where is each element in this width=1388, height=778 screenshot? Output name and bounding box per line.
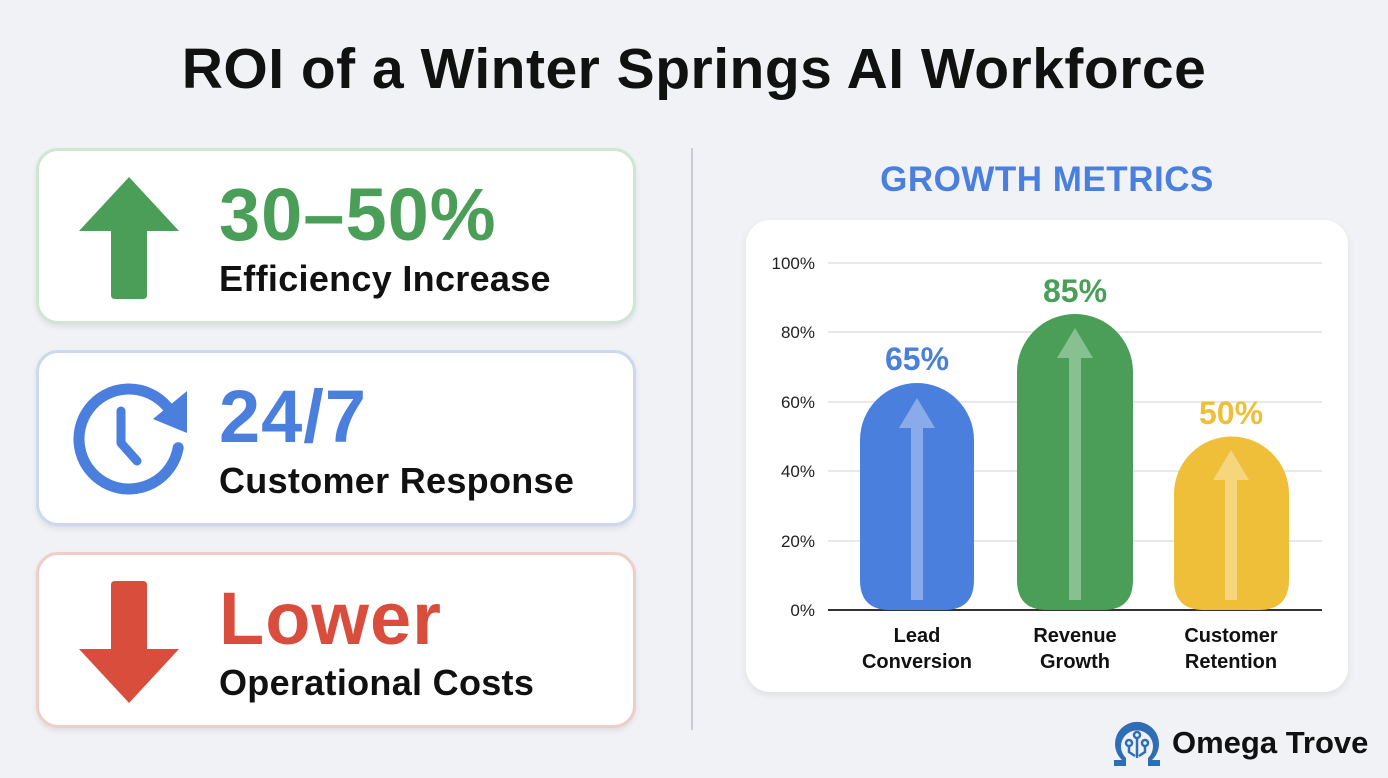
bar chart: 40% [781, 462, 815, 481]
label: efficiency increase: Efficiency Increase [219, 258, 551, 299]
x-axis labels: Revenue [1033, 625, 1117, 647]
bar: revenue growth [1017, 273, 1133, 610]
bar chart [772, 254, 1322, 673]
icon: clock [73, 384, 187, 494]
bar: revenue growth: 85% [1043, 273, 1107, 309]
bar chart: 0% [790, 601, 815, 620]
stat: lower: Lower [219, 577, 442, 660]
logo text: Omega Trove [1172, 725, 1368, 760]
title: ROI of a Winter Springs AI Workforce [182, 37, 1206, 101]
stat: 30-50%: 30–50% [219, 173, 497, 256]
x-axis labels: Growth [1040, 651, 1110, 673]
heading: growth metrics: GROWTH METRICS [880, 160, 1214, 199]
panel: costs [36, 552, 636, 728]
bar: lead conversion [860, 341, 974, 610]
bar chart: 20% [781, 532, 815, 551]
bar chart: 80% [781, 323, 815, 342]
bar: customer retention: 50% [1199, 395, 1263, 431]
bar: customer retention [1174, 395, 1289, 610]
label: customer response: Customer Response [219, 460, 574, 501]
x-axis labels: Conversion [862, 651, 972, 673]
bar: lead conversion: 65% [885, 341, 949, 377]
x-axis labels: Lead [894, 625, 940, 647]
icon: omega [1114, 722, 1160, 766]
x-axis labels [862, 625, 1278, 673]
icon: down arrow [79, 581, 179, 703]
stat: 24/7: 24/7 [219, 375, 367, 458]
label: operational costs: Operational Costs [219, 662, 534, 703]
x-axis labels: Customer [1184, 625, 1278, 647]
chart panel [746, 220, 1348, 692]
logo: omega trove [1114, 722, 1368, 766]
panel: efficiency [36, 148, 636, 324]
icon: up arrow [79, 177, 179, 299]
bar chart: 100% [772, 254, 815, 273]
x-axis labels: Retention [1185, 651, 1277, 673]
panel: response [36, 350, 636, 526]
bar chart: 60% [781, 393, 815, 412]
